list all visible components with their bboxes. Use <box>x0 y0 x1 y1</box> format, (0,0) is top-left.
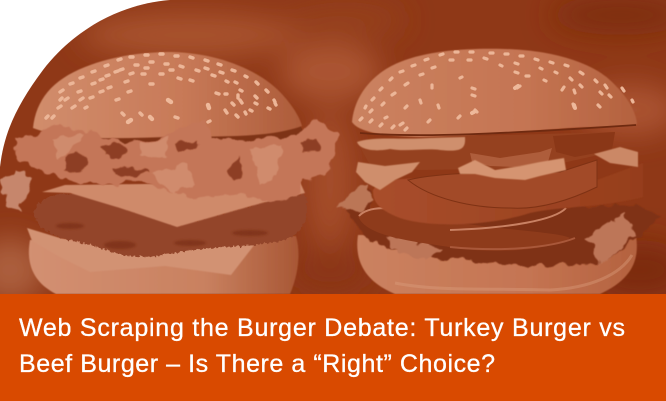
burger: turkey (right) <box>338 49 660 294</box>
sesame seeds <box>46 54 276 122</box>
bottom bun <box>29 236 298 294</box>
top bun <box>33 52 302 138</box>
bun shadow <box>106 126 302 144</box>
onion rings <box>358 208 570 251</box>
lower cheese <box>27 228 255 275</box>
faded lettuce at left edge <box>0 170 32 212</box>
photo background <box>0 0 666 302</box>
lower greens <box>345 188 660 266</box>
patty <box>34 193 307 257</box>
lettuce folds <box>66 138 320 182</box>
title text: Web Scraping the Burger Debate: Turkey Burger vs <box>19 314 625 342</box>
upper cheese <box>42 182 305 227</box>
photo panel: two burgers with orange duotone <box>0 0 666 302</box>
tomato slices <box>373 163 643 224</box>
pickles and sauce <box>370 134 595 170</box>
bottom bun <box>357 235 637 294</box>
burger: beef (left) <box>0 52 338 294</box>
title bar <box>0 294 666 401</box>
top bun <box>352 49 637 137</box>
title text: Beef Burger – Is There a “Right” Choice? <box>19 350 495 378</box>
sesame seeds <box>360 52 633 130</box>
lettuce <box>13 118 338 202</box>
